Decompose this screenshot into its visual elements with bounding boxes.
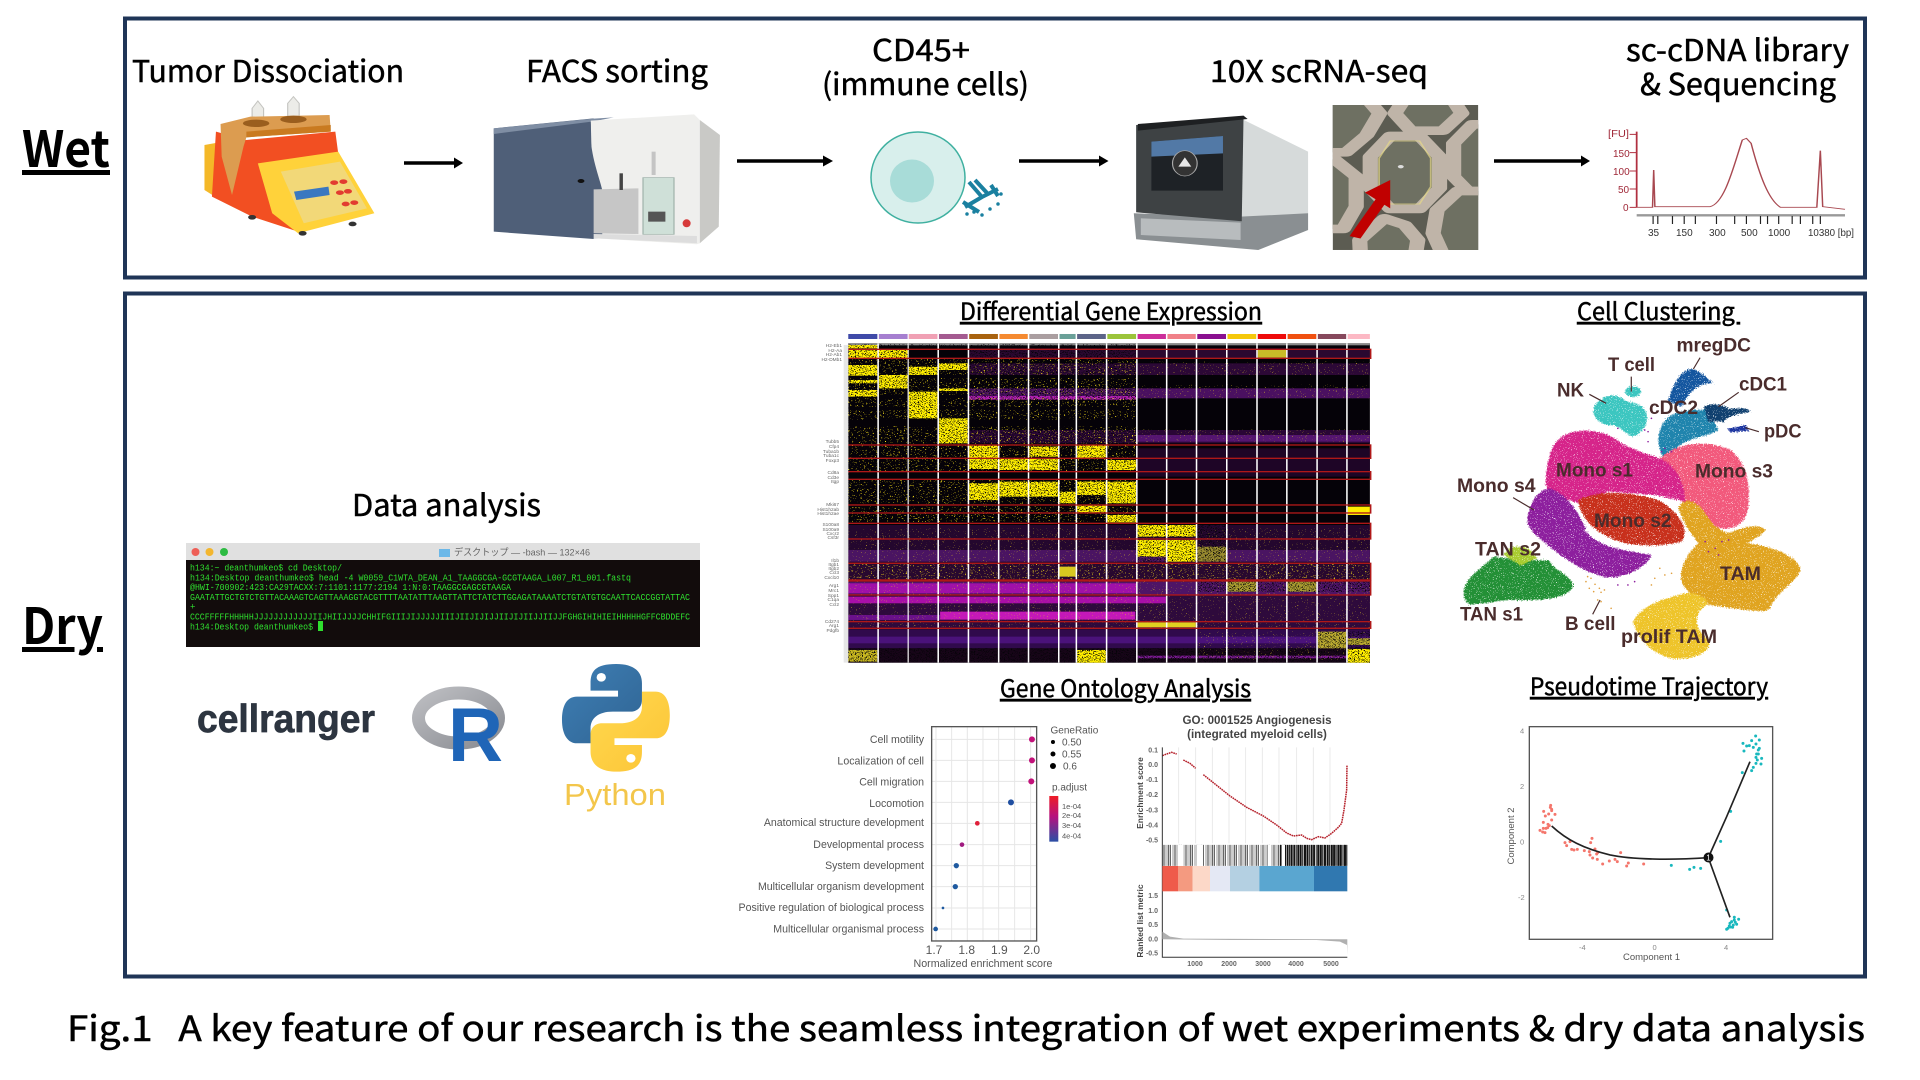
image: microfluidic wells with red arrow bbox=[1332, 105, 1478, 250]
heatmap gene labels: Cd8a bbox=[828, 470, 839, 476]
label: CD45+ (immune cells): CD45+ bbox=[872, 26, 970, 70]
GSEA axis labels: 0.5 bbox=[1148, 922, 1158, 929]
heatmap gene labels: Itgp bbox=[831, 479, 839, 485]
dot plot category labels: System development bbox=[825, 860, 924, 872]
dot plot category labels bbox=[738, 734, 925, 936]
trajectory axis labels: 4 bbox=[1724, 943, 1728, 952]
terminal window: GAATATTGCTGTCTGTTACAAAGTCAGTTAAAGGTACGTTTTAATATTTAAGTTATTCTATCTTGGAGATAAAATCTGTATGTGCAATTCACCGGTATTAC bbox=[190, 593, 691, 603]
heatmap gene labels: Spp1 bbox=[828, 593, 839, 599]
chart: bioanalyzer trace: 10380 [bp] bbox=[1808, 228, 1854, 239]
GSEA axis labels: Enrichment score bbox=[1135, 757, 1145, 829]
dot plot axis and legend text: GeneRatio bbox=[1050, 726, 1099, 736]
heatmap gene labels: S100a8 bbox=[822, 522, 839, 528]
dot plot category labels: Developmental process bbox=[813, 839, 924, 851]
UMAP cluster points bbox=[1464, 369, 1801, 659]
dot plot axis and legend text: p.adjust bbox=[1052, 782, 1087, 794]
GSEA axis labels: -0.3 bbox=[1146, 808, 1158, 814]
heatmap gene labels: Itgb1 bbox=[828, 562, 839, 568]
UMAP leader lines bbox=[1513, 358, 1759, 614]
logo: cellranger: cellranger bbox=[197, 698, 375, 741]
terminal window: デスクトップ — -bash — 132×46 bbox=[454, 546, 590, 558]
dot plot axis and legend text bbox=[914, 726, 1099, 970]
dot plot category labels: Locomotion bbox=[869, 798, 924, 810]
terminal window: h134:Desktop deanthumkeo$ head -4 W0059_C1WTA_DEAN_A1_TAAGGCGA-GCGTAAGA_L007_R1_001.fastq bbox=[190, 574, 631, 584]
label: sc-cDNA library & Sequencing: & Sequencing bbox=[1640, 60, 1836, 104]
trajectory axis labels: Component 1 bbox=[1623, 952, 1680, 963]
chart: GO dot plot bbox=[738, 726, 1099, 970]
chart: bioanalyzer trace: 0 bbox=[1623, 203, 1629, 214]
label: Tumor Dissociation: Tumor Dissociation bbox=[132, 47, 404, 91]
UMAP labels: TAN s1 bbox=[1460, 604, 1523, 626]
branch node 1 bbox=[1704, 852, 1714, 862]
terminal window: CCCFFFFFHHHHHJJJJJJJJJJJJIIJHIIJJJJCHHIFGIIIJIJJJJJIIIJIIJIJIJJIIJIJIIJJIIJJFGHGIHIHIEIHHHHHGFFCBDDEFC bbox=[190, 612, 691, 622]
dot plot axis and legend text: 3e-04 bbox=[1062, 821, 1081, 830]
chart: heatmap bbox=[817, 334, 1371, 663]
terminal window: + bbox=[190, 602, 195, 612]
trajectory axis labels: 0 bbox=[1652, 943, 1657, 952]
UMAP labels: pDC bbox=[1764, 420, 1802, 442]
heading: Pseudotime Trajectory: Pseudotime Trajectory bbox=[1530, 667, 1768, 702]
dot plot frame and points bbox=[932, 727, 1058, 941]
dot plot category labels: Cell motility bbox=[870, 734, 925, 746]
chart: bioanalyzer trace: 150 bbox=[1676, 228, 1693, 239]
dot plot category labels: Cell migration bbox=[859, 776, 924, 788]
GSEA axis labels: 1.0 bbox=[1148, 908, 1158, 915]
heatmap gene labels: Arg1 bbox=[829, 623, 839, 629]
GSEA axis labels: 3000 bbox=[1255, 961, 1271, 968]
dot plot axis and legend text: 1.7 bbox=[926, 943, 943, 957]
dot plot axis and legend text: 0.6 bbox=[1063, 762, 1077, 772]
UMAP labels: B cell bbox=[1565, 613, 1616, 635]
heatmap gene labels: Cd3e bbox=[828, 475, 839, 481]
label: CD45+ (immune cells): (immune cells) bbox=[822, 60, 1029, 104]
trajectory axis labels: Component 2 bbox=[1506, 807, 1517, 865]
logo: R bbox=[418, 693, 503, 778]
icon: FACS sorter bbox=[494, 114, 720, 244]
dot plot category labels: Localization of cell bbox=[837, 756, 924, 768]
heatmap gene labels: Il1b bbox=[831, 558, 839, 564]
GSEA axis labels: 1000 bbox=[1187, 961, 1203, 968]
heatmap gene labels bbox=[817, 343, 842, 634]
GSEA axis labels: 1.5 bbox=[1148, 893, 1158, 900]
heatmap gene labels: Cxcl10 bbox=[824, 575, 839, 581]
UMAP labels: TAM bbox=[1720, 563, 1761, 585]
UMAP labels: TAN s2 bbox=[1475, 538, 1541, 560]
chart: bioanalyzer trace: 100 bbox=[1613, 167, 1630, 178]
label: sc-cDNA library & Sequencing: sc-cDNA library bbox=[1626, 26, 1849, 70]
label: sc-cDNA library & Sequencing bbox=[1626, 26, 1849, 104]
heatmap cells bbox=[844, 334, 1371, 663]
UMAP scattered points bbox=[1586, 418, 1729, 608]
arrow: immune cells to 10X bbox=[1019, 156, 1108, 166]
logo: Python: Python bbox=[564, 777, 666, 812]
dot plot axis and legend text: 1.8 bbox=[958, 943, 975, 957]
label: 10X scRNA-seq: 10X scRNA-seq bbox=[1210, 47, 1428, 91]
UMAP labels: Mono s2 bbox=[1594, 510, 1672, 532]
GSEA axis labels: 4000 bbox=[1288, 961, 1304, 968]
heatmap gene labels: Cd274 bbox=[825, 619, 839, 625]
heatmap gene labels: Itgb2 bbox=[828, 566, 839, 572]
UMAP labels: NK bbox=[1557, 380, 1584, 402]
dot plot category labels: Anatomical structure development bbox=[764, 817, 924, 829]
GSEA axis labels: 5000 bbox=[1323, 961, 1339, 968]
label: FACS sorting: FACS sorting bbox=[526, 47, 708, 91]
dot plot axis and legend text: 4e-04 bbox=[1062, 832, 1081, 840]
UMAP labels: mregDC bbox=[1676, 334, 1751, 356]
heading: Gene Ontology Analysis: Gene Ontology Analysis bbox=[1000, 669, 1251, 704]
dot plot category labels: Positive regulation of biological process bbox=[738, 902, 924, 914]
UMAP labels: cDC2 bbox=[1649, 397, 1698, 419]
chart: pseudotime trajectory bbox=[1506, 726, 1773, 963]
heatmap gene labels: Mki67 bbox=[826, 502, 839, 508]
icon: immune cell with antibody bbox=[871, 132, 1001, 223]
dot plot axis and legend text: 1e-04 bbox=[1062, 802, 1081, 811]
panel: wet lab workflow bbox=[125, 18, 1865, 278]
trajectory axis labels: -2 bbox=[1518, 893, 1525, 902]
GSEA axis labels: Ranked list metric bbox=[1135, 884, 1145, 958]
UMAP labels: Mono s4 bbox=[1457, 475, 1536, 497]
UMAP labels: cDC1 bbox=[1739, 374, 1787, 396]
GSEA axis labels: 0.0 bbox=[1148, 762, 1158, 769]
panel: dry analysis bbox=[125, 292, 1865, 976]
branch node 1: 1 bbox=[1706, 854, 1711, 862]
terminal window: h134:Desktop deanthumkeo$ bbox=[190, 622, 314, 632]
heading: Cell Clustering: Cell Clustering bbox=[1577, 292, 1740, 327]
terminal window bbox=[186, 543, 700, 647]
terminal window: @HWI-700902:423:CA29TACXX:7:1101:1177:2194 1:N:0:TAAGGCGAGCGTAAGA bbox=[190, 583, 512, 593]
heatmap gene labels: Foxp3 bbox=[826, 458, 839, 464]
heatmap gene labels: H2-Aa bbox=[828, 348, 842, 354]
UMAP labels bbox=[1457, 334, 1802, 648]
heatmap gene labels: C1qa bbox=[828, 597, 839, 603]
UMAP labels: T cell bbox=[1608, 354, 1655, 376]
heatmap gene labels: Hist1h2ab bbox=[817, 507, 839, 513]
dot plot axis and legend text: Normalized enrichment score bbox=[914, 958, 1052, 970]
trajectory axis labels: 0 bbox=[1520, 838, 1524, 846]
icon: tumor dissociator bbox=[204, 97, 374, 233]
heatmap gene labels: Pdgfb bbox=[826, 628, 839, 634]
heatmap gene labels: Tuba1c bbox=[823, 453, 840, 459]
chart: UMAP clusters bbox=[1457, 334, 1802, 659]
chart: bioanalyzer trace: [FU] bbox=[1608, 129, 1629, 140]
heatmap gene labels: Arg1 bbox=[829, 583, 839, 589]
dot plot axis and legend text: 2.0 bbox=[1023, 943, 1040, 957]
GSEA plot marks bbox=[1162, 747, 1347, 957]
heatmap gene labels: Mrc1 bbox=[828, 588, 839, 594]
heatmap gene labels: H2-Ab1 bbox=[826, 352, 842, 358]
chart: GSEA enrichment plot bbox=[1135, 714, 1347, 968]
trajectory axis labels: 4 bbox=[1520, 726, 1524, 736]
heatmap gene labels: Cfp4 bbox=[829, 444, 839, 450]
arrow: FACS to immune cells bbox=[737, 156, 833, 166]
GSEA axis labels: -0.2 bbox=[1146, 792, 1158, 799]
heatmap gene labels: H2-DMb1 bbox=[821, 357, 842, 363]
terminal window: h134:~ deanthumkeo$ cd Desktop/ bbox=[190, 564, 342, 574]
heatmap gene labels: Cxcr2 bbox=[826, 531, 839, 537]
GSEA axis labels: 0.1 bbox=[1148, 748, 1158, 754]
trajectory axis labels bbox=[1506, 726, 1728, 963]
GSEA title: GO: 0001525 Angiogenesis bbox=[1182, 714, 1332, 727]
chart: bioanalyzer trace bbox=[1608, 129, 1854, 239]
GSEA title: (integrated myeloid cells) bbox=[1187, 728, 1327, 741]
GSEA title bbox=[1182, 714, 1332, 741]
dot plot axis and legend text: 0.55 bbox=[1062, 750, 1082, 760]
UMAP labels: prolif TAM bbox=[1621, 626, 1717, 648]
logo: R: R bbox=[448, 693, 503, 778]
heatmap gene labels: Hist1h2ae bbox=[817, 511, 839, 517]
heatmap gene labels: Tubb5 bbox=[826, 439, 839, 445]
heading: Differential Gene Expression: Differential Gene Expression bbox=[960, 292, 1262, 327]
heatmap gene labels: Csf3r bbox=[828, 535, 839, 541]
GSEA axis labels: -0.5 bbox=[1146, 950, 1158, 958]
chart: bioanalyzer trace: 500 bbox=[1741, 228, 1758, 239]
chart: bioanalyzer trace: 300 bbox=[1709, 228, 1726, 239]
chart: bioanalyzer trace: 35 bbox=[1648, 228, 1660, 239]
logo: Python bbox=[562, 664, 670, 812]
GSEA axis labels bbox=[1135, 748, 1339, 968]
dot plot category labels: Multicellular organismal process bbox=[773, 924, 924, 936]
UMAP labels: Mono s3 bbox=[1695, 460, 1773, 482]
figure caption: Fig.1 A key feature of our research is the seamless integration of wet experiments & dry data analysis bbox=[67, 1001, 1865, 1052]
chart: bioanalyzer trace: 150 bbox=[1613, 149, 1630, 160]
arrow: dissociation to FACS bbox=[404, 158, 463, 168]
arrow: 10X to library bbox=[1494, 156, 1590, 166]
heading: Data analysis: Data analysis bbox=[352, 481, 541, 525]
heatmap gene labels: Ccl2 bbox=[829, 602, 839, 608]
heatmap gene labels: H2-Eb1 bbox=[826, 343, 842, 349]
heatmap gene labels: Ccl3 bbox=[829, 570, 839, 576]
trajectory axis labels: -4 bbox=[1579, 943, 1586, 952]
heading: Wet: Wet bbox=[22, 110, 110, 182]
chart: bioanalyzer trace: 50 bbox=[1618, 185, 1630, 196]
icon: 10X Chromium controller bbox=[1134, 116, 1308, 250]
GSEA axis labels: -0.1 bbox=[1146, 777, 1158, 784]
GSEA axis labels: 2000 bbox=[1221, 961, 1237, 968]
chart: bioanalyzer trace: 1000 bbox=[1768, 228, 1791, 239]
trajectory plot marks bbox=[1529, 727, 1773, 939]
wet panel frame bbox=[125, 18, 1865, 278]
dot plot axis and legend text: 1.9 bbox=[991, 943, 1008, 957]
dot plot category labels: Multicellular organism development bbox=[758, 881, 924, 893]
dot plot axis and legend text: 0.50 bbox=[1062, 738, 1082, 748]
heatmap gene labels: S100a9 bbox=[822, 527, 839, 533]
GSEA axis labels: -0.5 bbox=[1146, 838, 1158, 844]
heading: Dry: Dry bbox=[22, 587, 103, 659]
UMAP labels: Mono s1 bbox=[1556, 460, 1633, 482]
GSEA axis labels: -0.4 bbox=[1146, 822, 1158, 830]
dry panel frame bbox=[125, 294, 1865, 976]
label: CD45+ (immune cells) bbox=[822, 26, 1029, 104]
GSEA axis labels: 0.0 bbox=[1148, 936, 1158, 944]
trajectory axis labels: 2 bbox=[1520, 782, 1524, 791]
heatmap gene labels: Tuba1b bbox=[823, 449, 839, 455]
dot plot axis and legend text: 2e-04 bbox=[1062, 811, 1081, 820]
